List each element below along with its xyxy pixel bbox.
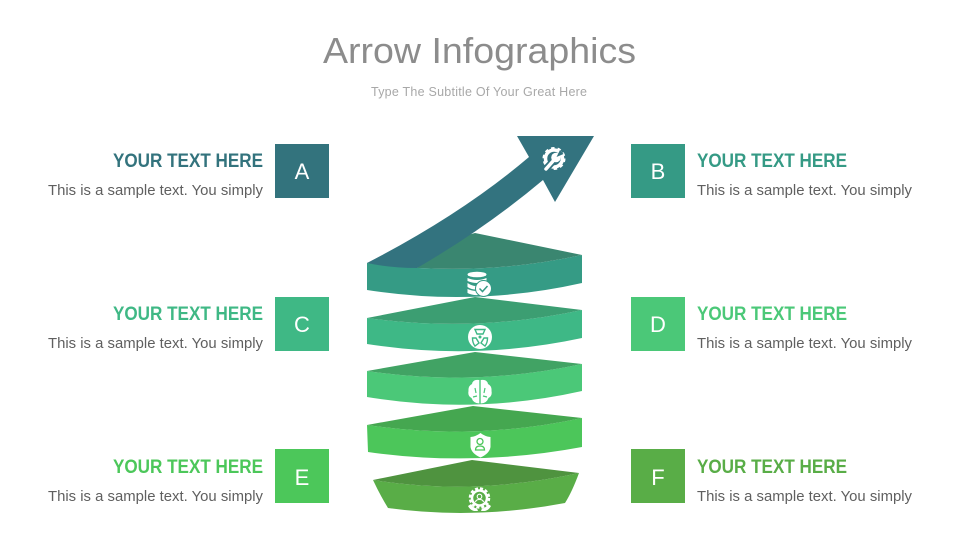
text C: This is a sample text. You simply — [48, 336, 264, 352]
badge D: D — [650, 312, 666, 337]
panel: D — [631, 297, 913, 352]
band 3 — [367, 352, 582, 405]
icon: shield person — [470, 433, 490, 458]
band 4 — [367, 406, 582, 458]
heading B: YOUR TEXT HERE — [697, 150, 847, 172]
panel: A — [48, 144, 329, 199]
heading D: YOUR TEXT HERE — [697, 303, 847, 325]
badge C — [275, 297, 329, 351]
icon: brain — [468, 380, 492, 404]
badge E — [275, 449, 329, 503]
text B: This is a sample text. You simply — [697, 183, 913, 199]
badge E: E — [295, 465, 309, 490]
band 1 — [367, 233, 582, 297]
panel: B — [631, 144, 913, 199]
text E: This is a sample text. You simply — [48, 489, 264, 505]
badge B: B — [651, 159, 665, 184]
panel: F — [631, 449, 913, 505]
badge F — [631, 449, 685, 503]
heading C: YOUR TEXT HERE — [113, 303, 263, 325]
heading E: YOUR TEXT HERE — [113, 456, 263, 478]
subtitle: Type The Subtitle Of Your Great Here — [371, 85, 587, 99]
band 5 — [373, 460, 579, 513]
badge F: F — [651, 465, 665, 490]
arrow — [367, 136, 594, 268]
panel: E — [48, 449, 329, 505]
band 2 — [367, 297, 582, 351]
icon: gear and wrench — [544, 148, 564, 171]
icon: radiation — [468, 325, 492, 349]
badge D — [631, 297, 685, 351]
badge A — [275, 144, 329, 198]
text D: This is a sample text. You simply — [697, 336, 913, 352]
heading F: YOUR TEXT HERE — [697, 456, 847, 478]
heading A: YOUR TEXT HERE — [113, 150, 263, 172]
panel: C — [48, 297, 329, 352]
text F: This is a sample text. You simply — [697, 489, 913, 505]
text A: This is a sample text. You simply — [48, 183, 264, 199]
icon: award badge — [468, 488, 491, 511]
badge B — [631, 144, 685, 198]
badge C: C — [294, 312, 310, 337]
badge A: A — [295, 159, 310, 184]
title: Arrow Infographics — [323, 30, 636, 71]
icon: database check — [468, 272, 492, 296]
